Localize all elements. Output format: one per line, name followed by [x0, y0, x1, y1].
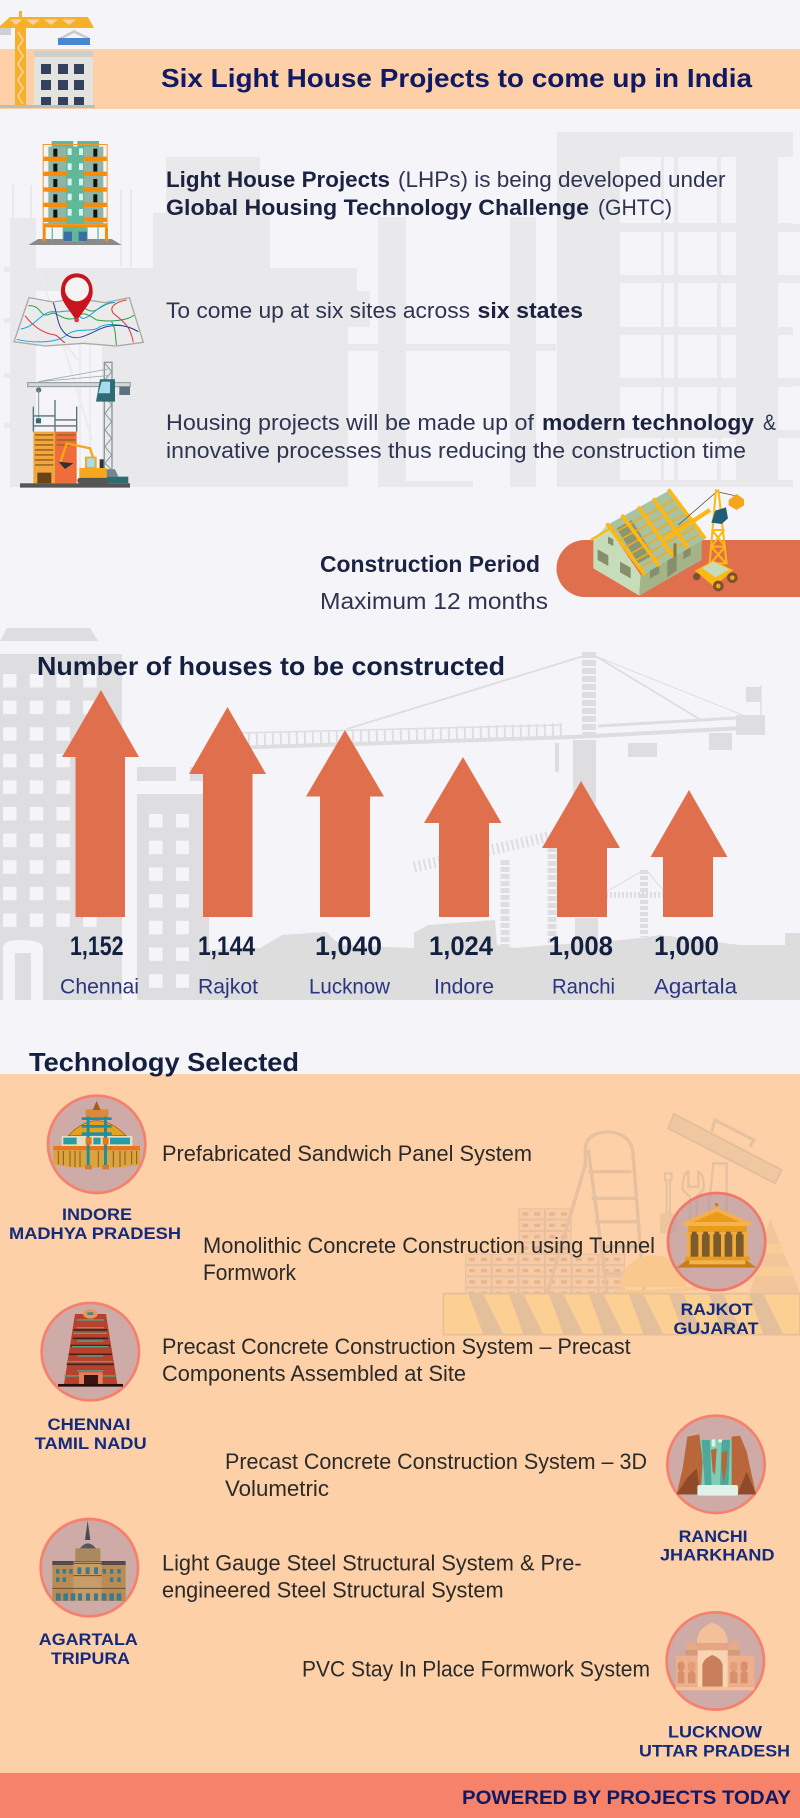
icon: map with location pin: [14, 273, 143, 346]
labels: cities: Chennai: [60, 976, 139, 998]
arrow: Ranchi: [542, 781, 620, 917]
text: light gauge steel: Light Gauge Steel Structural System & Pre-: [162, 1551, 582, 1576]
text: construction period: Construction Period: [320, 551, 540, 577]
values: house counts: 1,144: [198, 931, 255, 961]
label: Lucknow: LUCKNOW: [668, 1723, 763, 1742]
text: light house projects: (GHTC): [598, 195, 672, 220]
chart: house count arrows: [62, 690, 728, 917]
label: Rajkot: [674, 1300, 759, 1338]
label: Chennai: CHENNAI: [48, 1415, 130, 1434]
label: Ranchi: RANCHI: [679, 1527, 748, 1546]
values: house counts: 1,152: [70, 931, 124, 961]
icon: crane and building: [0, 11, 95, 108]
label: Indore: MADHYA PRADESH: [9, 1224, 181, 1243]
arrow: Rajkot: [189, 707, 266, 917]
text: six sites: six states: [478, 298, 583, 323]
labels: cities: Agartala: [654, 976, 737, 998]
label: Chennai: TAMIL NADU: [35, 1434, 147, 1453]
text: light gauge steel: engineered Steel Structural System: [162, 1578, 504, 1603]
text: precast concrete components: Precast Concrete Construction System – Precast: [162, 1334, 631, 1359]
arrow: Lucknow: [306, 730, 384, 917]
text: modern technology: innovative processes thus reducing the construction time: [166, 438, 746, 463]
text: modern technology: [166, 410, 776, 463]
label: Chennai: [35, 1415, 147, 1453]
panel: construction period pill: [556, 540, 800, 597]
text: modern technology: Housing projects will be made up of: [166, 410, 535, 435]
text: construction period: Maximum 12 months: [320, 588, 548, 614]
arrow: Indore: [424, 757, 502, 917]
labels: cities: [60, 976, 737, 998]
labels: cities: Indore: [434, 976, 494, 998]
icon: Lucknow monument: [667, 1612, 764, 1710]
labels: cities: Rajkot: [198, 976, 258, 998]
heading: number of houses: Number of houses to be constructed: [37, 651, 505, 681]
text: monolithic concrete: Monolithic Concrete Construction using Tunnel: [203, 1233, 655, 1258]
background: faded city and cranes: [0, 628, 800, 1000]
text: construction period: [320, 551, 548, 614]
text: modern technology: &: [763, 410, 776, 435]
icon: Ranchi waterfall: [667, 1416, 765, 1513]
text: light house projects: Light House Projects: [166, 167, 390, 192]
values: house counts: 1,008: [548, 931, 613, 961]
label: Ranchi: [660, 1527, 774, 1565]
arrow: Agartala: [650, 790, 728, 917]
header band: [0, 49, 800, 109]
icon: Agartala palace: [41, 1519, 138, 1616]
label: Indore: [9, 1205, 181, 1243]
label: Rajkot: RAJKOT: [681, 1300, 753, 1319]
panel: technology selected: [0, 1074, 800, 1773]
text: PVC formwork: PVC Stay In Place Formwork System: [302, 1657, 650, 1682]
text: precast concrete components: Components Assembled at Site: [162, 1361, 466, 1386]
text: modern technology: modern technology: [542, 410, 755, 435]
icon: house with crane: [591, 489, 744, 596]
label: Agartala: AGARTALA: [39, 1630, 138, 1649]
text: monolithic concrete: Formwork: [203, 1260, 297, 1285]
icon: crane and excavator at building: [20, 362, 130, 488]
values: house counts: [70, 931, 719, 961]
label: Rajkot: GUJARAT: [674, 1319, 759, 1338]
label: Indore: INDORE: [62, 1205, 132, 1224]
text: light gauge steel: [162, 1551, 582, 1603]
text: light house projects: Global Housing Technology Challenge: [166, 195, 589, 220]
text: precast 3D volumetric: [225, 1449, 647, 1501]
text: light house projects: [166, 167, 726, 220]
label: Ranchi: JHARKHAND: [660, 1546, 774, 1565]
background: faded construction buildings: [4, 132, 800, 487]
labels: cities: Ranchi: [552, 976, 615, 998]
footer text: POWERED BY PROJECTS TODAY: [462, 1788, 791, 1809]
label: Agartala: TRIPURA: [51, 1649, 130, 1668]
values: house counts: 1,024: [429, 931, 493, 961]
text: precast 3D volumetric: Precast Concrete Construction System – 3D: [225, 1449, 647, 1474]
label: Agartala: [39, 1630, 138, 1668]
text: precast 3D volumetric: Volumetric: [225, 1476, 329, 1501]
footer band: [0, 1773, 800, 1818]
icon: Rajkot temple: [668, 1193, 765, 1290]
labels: cities: Lucknow: [309, 976, 391, 998]
values: house counts: 1,000: [654, 931, 719, 961]
label: Lucknow: [639, 1723, 790, 1761]
icon: Chennai gopuram: [42, 1303, 139, 1400]
arrow: Chennai: [62, 690, 139, 917]
values: house counts: 1,040: [315, 931, 382, 961]
text: light house projects: (LHPs) is being developed under: [398, 167, 726, 192]
label: Lucknow: UTTAR PRADESH: [639, 1742, 790, 1761]
text: six sites: To come up at six sites across: [166, 298, 470, 323]
text: precast concrete components: [162, 1334, 631, 1386]
heading: technology selected: Technology Selected: [29, 1047, 299, 1077]
icon: Indore stupa: [48, 1096, 145, 1193]
text: monolithic concrete: [203, 1233, 655, 1285]
background: faded construction tools: [443, 1114, 800, 1335]
title: Six Light House Projects to come up in India: [161, 63, 753, 93]
icon: apartment building: [28, 141, 122, 245]
text: prefabricated sandwich panel: Prefabricated Sandwich Panel System: [162, 1141, 532, 1166]
